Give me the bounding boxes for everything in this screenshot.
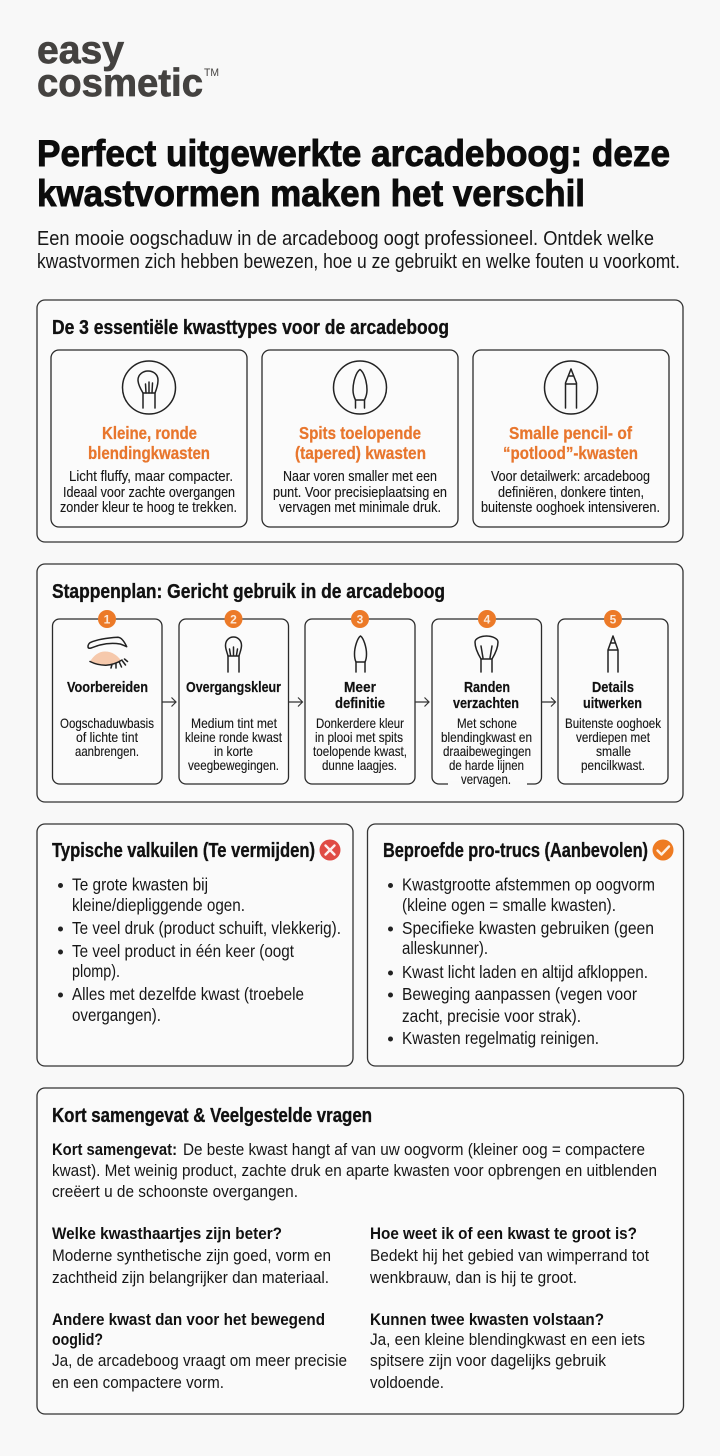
logo	[37, 29, 219, 105]
FAQ: other brush	[52, 1311, 347, 1392]
step text: kleine ronde kwast	[185, 730, 282, 745]
intro text: Een mooie oogschaduw in de arcadeboog oogt professioneel. Ontdek welke	[37, 228, 654, 250]
FAQ: other brush: ooglid?	[52, 1331, 103, 1349]
card heading: (tapered) kwasten	[295, 443, 426, 463]
step title: Overgangskleur	[186, 679, 281, 696]
panel heading: step plan: Stappenplan: Gericht gebruik in de arcadeboog	[52, 580, 445, 603]
icon: eye and brow	[88, 637, 128, 668]
step text: Oogschaduwbasis	[60, 716, 154, 731]
summary text: creëert u de schoonste overgangen.	[52, 1183, 298, 1201]
icon: pencil brush	[608, 636, 618, 672]
icon: fan brush	[475, 636, 498, 672]
panel: summary and FAQ	[37, 1088, 684, 1414]
pro tips list: Beweging aanpassen (vegen voor	[402, 984, 637, 1004]
card heading: Spits toelopende	[299, 423, 421, 443]
badge 4: 4	[484, 612, 491, 626]
step text: verdiepen met	[576, 730, 650, 745]
pitfalls list	[58, 874, 341, 1025]
icon: pencil brush	[544, 361, 598, 414]
step title	[583, 679, 642, 712]
pro tips list	[388, 874, 655, 1048]
pro tips list: Kwastgrootte afstemmen op oogvorm	[402, 874, 655, 894]
pro tips list: (kleine ogen = smalle kwasten).	[402, 895, 616, 915]
icon: round brush	[226, 637, 242, 672]
arrow	[415, 698, 429, 706]
FAQ: two brushes: Ja, een kleine blendingkwast en een iets	[370, 1331, 645, 1349]
panel: brush types	[37, 300, 683, 542]
icon: red cross	[320, 840, 340, 860]
icon: tapered brush	[334, 361, 386, 414]
card heading: “potlood”-kwasten	[503, 443, 638, 463]
FAQ: two brushes: voldoende.	[370, 1374, 444, 1392]
card heading: blendingkwasten	[88, 443, 210, 463]
step text: vervagen.	[461, 772, 511, 787]
summary text: De beste kwast hangt af van uw oogvorm (kleiner oog = compactere	[183, 1141, 645, 1159]
panel: pro tips	[368, 824, 684, 1066]
FAQ: brush size: wenkbrauw, dan is hij te groot.	[369, 1269, 577, 1287]
badge 2	[224, 610, 242, 628]
FAQ: brush hair: zachtheid zijn belangrijker dan materiaal.	[52, 1269, 329, 1287]
step title: Meer	[344, 679, 376, 696]
step title: Voorbereiden	[67, 679, 148, 696]
step text: pencilkwast.	[581, 758, 645, 773]
step text: aanbrengen.	[75, 744, 139, 759]
step title: Randen	[464, 679, 510, 696]
step title: uitwerken	[583, 695, 642, 712]
title: kwastvormen maken het verschil	[37, 173, 585, 214]
pro tips list: alleskunner).	[402, 938, 488, 958]
icon: round brush	[122, 361, 176, 414]
card heading: Smalle pencil- of	[509, 423, 632, 443]
badge 1: 1	[104, 612, 111, 626]
step text	[565, 716, 661, 773]
step text	[441, 716, 532, 787]
step text: in korte	[214, 744, 253, 759]
card: tapered brushes	[262, 350, 458, 527]
pro tips list: Kwast licht laden en altijd afkloppen.	[402, 962, 648, 982]
step text: Donkerdere kleur	[316, 716, 404, 731]
step text: Buitenste ooghoek	[565, 716, 661, 731]
step text	[313, 716, 407, 773]
card heading	[503, 423, 638, 463]
step text	[185, 716, 282, 773]
step title: Details	[592, 679, 634, 696]
card text: Ideaal voor zachte overgangen	[63, 485, 235, 501]
FAQ: other brush: Andere kwast dan voor het bewegend	[52, 1311, 325, 1329]
pitfalls list: overgangen).	[72, 1005, 161, 1025]
card text: Naar voren smaller met een	[283, 469, 437, 485]
step text: dunne laagjes.	[322, 758, 397, 773]
FAQ: brush hair	[52, 1225, 331, 1287]
logo: easy	[37, 29, 124, 72]
FAQ: brush hair: Welke kwasthaartjes zijn beter?	[52, 1225, 282, 1243]
FAQ: other brush: en een compactere vorm.	[52, 1374, 224, 1392]
pitfalls list: Te veel druk (product schuift, vlekkerig).	[72, 918, 341, 938]
pitfalls list: kleine/diepliggende ogen.	[72, 895, 245, 915]
pitfalls list: plomp).	[72, 961, 120, 981]
FAQ: brush hair: Moderne synthetische zijn goed, vorm en	[52, 1247, 331, 1265]
title: Perfect uitgewerkte arcadeboog: deze	[37, 133, 670, 174]
FAQ: two brushes: Kunnen twee kwasten volstaan?	[370, 1311, 604, 1329]
card text: zonder kleur te hoog te trekken.	[60, 500, 237, 516]
step 1	[52, 610, 162, 784]
step text: veegbewegingen.	[188, 758, 279, 773]
arrow	[542, 698, 556, 706]
FAQ: two brushes: spitsere zijn voor dagelijks gebruik	[370, 1352, 607, 1370]
step 3	[305, 610, 415, 784]
pitfalls list: Te grote kwasten bij	[72, 874, 208, 894]
badge 3	[351, 610, 369, 628]
step text: blendingkwast en	[441, 730, 532, 745]
title	[37, 133, 670, 214]
icon: tapered brush	[354, 636, 366, 672]
badge 4	[478, 610, 496, 628]
pitfalls list: Alles met dezelfde kwast (troebele	[72, 984, 304, 1004]
card text	[60, 469, 237, 516]
card text	[481, 469, 660, 516]
card heading	[295, 423, 426, 463]
panel heading: pro tips: Beproefde pro-trucs (Aanbevolen)	[383, 839, 648, 862]
FAQ: other brush: Ja, de arcadeboog vraagt om meer precisie	[52, 1352, 347, 1370]
panel heading: brush types: De 3 essentiële kwasttypes voor de arcadeboog	[52, 316, 449, 339]
panel: pitfalls	[37, 824, 353, 1066]
card text: vervagen met minimale druk.	[279, 500, 441, 516]
step text: toelopende kwast,	[313, 744, 407, 759]
step text	[60, 716, 154, 759]
FAQ: brush size	[369, 1225, 649, 1287]
step text: smalle	[596, 744, 631, 759]
FAQ: brush size: Hoe weet ik of een kwast te groot is?	[370, 1225, 637, 1243]
badge 5: 5	[610, 612, 617, 626]
badge 2: 2	[230, 612, 237, 626]
card: pencil brushes	[473, 350, 669, 527]
step text: Met schone	[457, 716, 517, 731]
badge 3: 3	[357, 612, 364, 626]
step text: of lichte tint	[76, 730, 138, 745]
panel heading: pitfalls: Typische valkuilen (Te vermijden)	[52, 839, 315, 862]
step title	[335, 679, 385, 712]
pro tips list: Kwasten regelmatig reinigen.	[402, 1028, 599, 1048]
step title	[453, 679, 519, 712]
card: round blending brushes	[51, 350, 247, 527]
card text: buitenste ooghoek intensiveren.	[481, 500, 660, 516]
badge 5	[604, 610, 622, 628]
card text: Licht fluffy, maar compacter.	[69, 469, 233, 485]
icon: orange check	[652, 840, 674, 860]
pitfalls list: Te veel product in één keer (oogt	[72, 941, 294, 961]
pro tips list: zacht, precisie voor strak).	[402, 1006, 581, 1026]
summary text: Kort samengevat:	[52, 1141, 177, 1159]
step 5	[558, 610, 668, 784]
step title: definitie	[335, 695, 385, 712]
panel: step plan	[37, 564, 683, 802]
panel heading: summary and FAQ: Kort samengevat & Veelgestelde vragen	[52, 1104, 372, 1127]
card text	[273, 469, 447, 516]
card text: definiëren, donkere tinten,	[498, 485, 644, 501]
summary text: kwast). Met weinig product, zachte druk en aparte kwasten voor opbrengen en uitblenden	[52, 1162, 657, 1180]
summary text	[52, 1141, 657, 1201]
step 4	[432, 610, 542, 787]
card text: Voor detailwerk: arcadeboog	[491, 469, 650, 485]
card heading	[88, 423, 210, 463]
card heading: Kleine, ronde	[102, 423, 197, 443]
arrow	[288, 698, 302, 706]
step text: de harde lijnen	[449, 758, 524, 773]
step 2	[179, 610, 288, 784]
card text: punt. Voor precisieplaatsing en	[273, 485, 447, 501]
FAQ: brush size: Bedekt hij het gebied van wimperrand tot	[370, 1247, 649, 1265]
logo: cosmetic	[37, 62, 203, 105]
step text: draaibewegingen	[443, 744, 531, 759]
step text: Medium tint met	[191, 716, 277, 731]
FAQ: two brushes	[370, 1311, 645, 1392]
arrow	[162, 698, 176, 706]
step text: in plooi met spits	[315, 730, 403, 745]
step title: verzachten	[453, 695, 519, 712]
badge 1	[98, 610, 116, 628]
pro tips list: Specifieke kwasten gebruiken (geen	[402, 918, 654, 938]
intro text	[37, 228, 680, 273]
logo: TM	[204, 67, 219, 79]
